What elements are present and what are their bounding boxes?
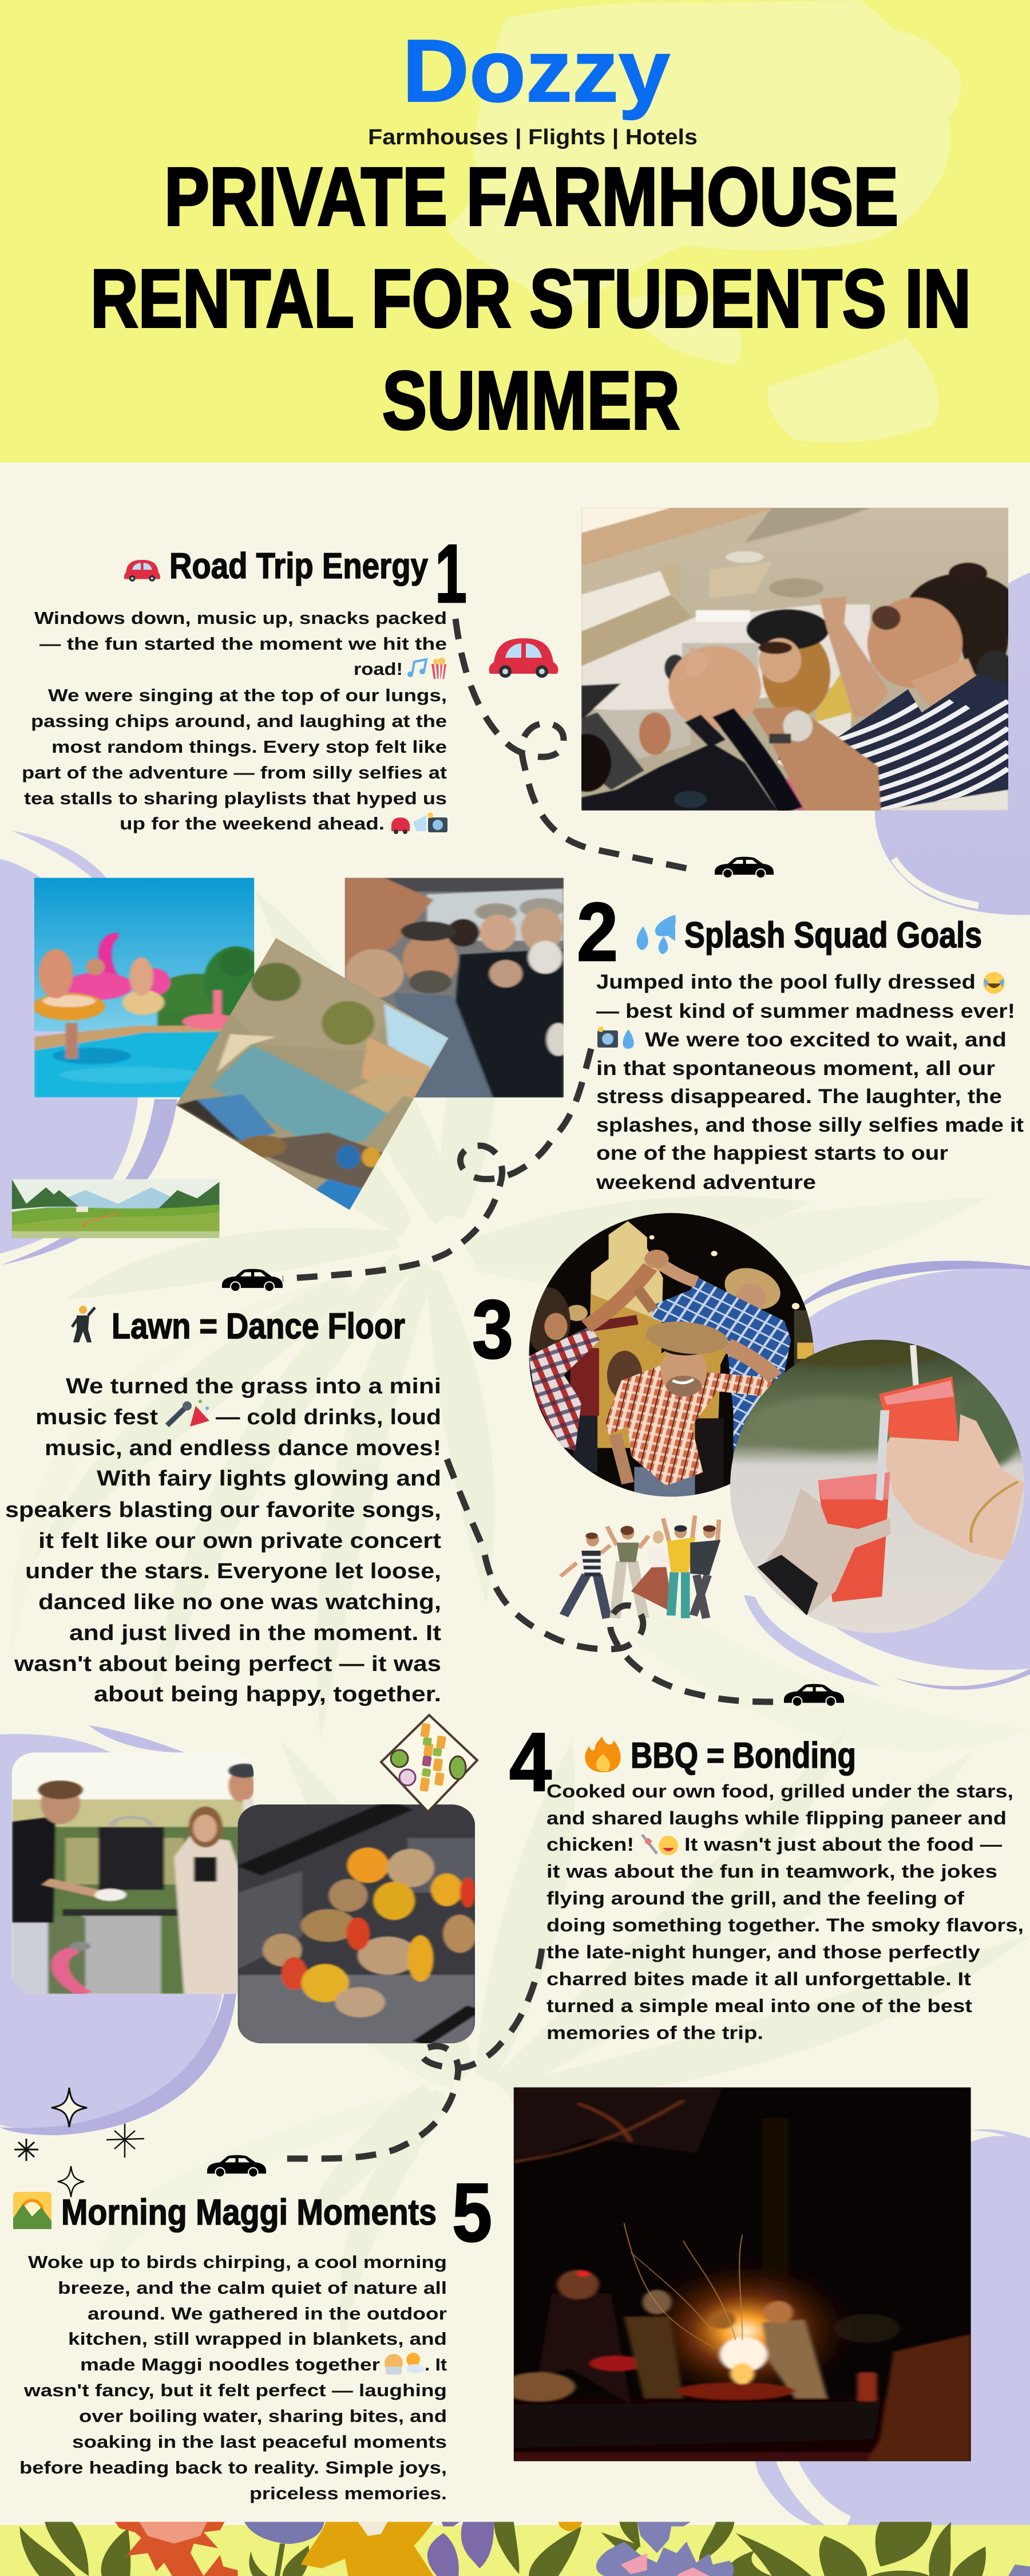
photo: rotated poolside villa <box>171 935 453 1212</box>
section 4 body text: the late-night hunger, and those perfectly <box>546 1942 980 1962</box>
emoji: car, dash, camera <box>391 812 447 834</box>
icon: water splash <box>636 915 676 954</box>
section 4 body text: chicken! <box>546 1834 634 1855</box>
section 5 body text: over boiling water, sharing bites, and <box>79 2406 447 2426</box>
section 3 body text: music, and endless dance moves! <box>45 1436 441 1460</box>
section 4 body text: memories of the trip. <box>546 2022 763 2043</box>
number 5: 5 <box>452 2166 492 2259</box>
dancer 5 <box>690 1520 720 1618</box>
illustration: green landscape <box>12 1179 219 1238</box>
section 3 body text: — cold drinks, loud <box>216 1405 441 1429</box>
icon: black car 2 <box>222 1269 283 1291</box>
section 4 body text: charred bites made it all unforgettable. It <box>546 1969 971 1989</box>
icon: black car 4 <box>207 2155 266 2177</box>
number 3: 3 <box>472 1283 513 1376</box>
title <box>90 151 971 447</box>
illustration: group of dancers <box>561 1516 720 1618</box>
section 4 body text: flying around the grill, and the feeling of <box>546 1888 964 1909</box>
icon: sunrise over mountains <box>13 2192 52 2229</box>
yellow lily <box>301 2522 582 2576</box>
section 1 body text: We were singing at the top of our lungs, <box>48 685 447 705</box>
section 5 body text: . It <box>425 2354 447 2374</box>
lavender blob: left of section 4 <box>0 1725 236 2135</box>
lavender blob: left of section 2 <box>0 831 177 1265</box>
emoji: kebab and yum face <box>642 1835 678 1855</box>
section 5 body text: around. We gathered in the outdoor <box>88 2304 447 2324</box>
section 1 body text: up for the weekend ahead. <box>120 813 385 833</box>
icon: black car 1 <box>715 857 774 878</box>
section 1 body text: part of the adventure — from silly selfies at <box>22 762 447 783</box>
lavender blob: right of section 3 <box>744 1262 1030 1690</box>
section 2 body text: We were too excited to wait, and <box>645 1029 1007 1051</box>
lavender blob: bottom right <box>752 2129 1030 2526</box>
section 4 body text: Cooked our own food, grilled under the stars, <box>546 1781 1013 1801</box>
icon: black car 3 <box>784 1684 844 1706</box>
lavender blob: top right <box>875 572 1030 915</box>
section 5 body text: wasn't fancy, but it felt perfect — laughing <box>23 2380 447 2400</box>
section 4 body text <box>546 1781 1024 2043</box>
dashed route 3 <box>447 1459 778 1702</box>
section 3 body text: and just lived in the moment. It <box>69 1621 441 1645</box>
tagline: Farmhouses | Flights | Hotels <box>368 125 698 149</box>
section 1 heading: Road Trip Energy <box>169 546 428 586</box>
dancer 1 <box>561 1532 610 1618</box>
dancer 3 <box>631 1531 674 1613</box>
emoji: laughing face <box>983 972 1005 994</box>
dashed route 4 <box>279 1949 542 2159</box>
section 3 body text <box>5 1374 441 1706</box>
section 2 body text: splashes, and those silly selfies made it <box>596 1114 1024 1136</box>
section 1 body text: road! <box>354 659 403 679</box>
section 3 body text: it felt like our own private concert <box>38 1529 441 1553</box>
section 2 body text: Jumped into the pool fully dressed <box>596 971 976 993</box>
photo: campfire at night <box>502 2087 971 2461</box>
section 5 body text <box>19 2252 447 2503</box>
section 4 body text: turned a simple meal into one of the best <box>546 1996 972 2016</box>
icon: fire <box>585 1736 621 1772</box>
lupin flowers <box>596 2522 1030 2576</box>
section 3 body text: speakers blasting our favorite songs, <box>5 1498 441 1522</box>
section 5 body text: before heading back to reality. Simple joys, <box>19 2458 447 2478</box>
section 1 body text: Windows down, music up, snacks packed <box>34 608 447 628</box>
title: SUMMER <box>382 354 680 447</box>
icons: sparkles <box>14 2088 144 2197</box>
dancer 4 <box>663 1516 696 1618</box>
photo: grilled skewers <box>238 1804 477 2043</box>
dancer 2 <box>607 1526 649 1618</box>
section 5 body text: priceless memories. <box>249 2483 447 2503</box>
icon: skewer platter <box>381 1715 477 1812</box>
photo: group selfie <box>345 878 570 1097</box>
footer: floral band <box>0 2522 1030 2576</box>
section 2 body text: stress disappeared. The laughter, the <box>596 1085 1002 1108</box>
icon: red car <box>124 560 160 582</box>
section 1 body text: most random things. Every stop felt like <box>52 737 447 757</box>
header band <box>0 0 1030 463</box>
orange flower <box>115 2522 238 2576</box>
section 2 body text: one of the happiest starts to our <box>596 1142 948 1164</box>
section 1 body text: passing chips around, and laughing at the <box>31 711 447 731</box>
section 5 body text: breeze, and the calm quiet of nature all <box>58 2278 447 2298</box>
emoji: camera and droplet <box>597 1026 634 1049</box>
faint world map <box>447 0 961 442</box>
icon: big red car <box>489 638 558 678</box>
section 1 body text <box>22 608 447 834</box>
section 1 body text: tea stalls to sharing playlists that hyped us <box>24 788 447 808</box>
section 3 body text: under the stars. Everyone let loose, <box>25 1559 441 1583</box>
section 2 body text <box>596 971 1024 1194</box>
section 4 body text: and shared laughs while flipping paneer and <box>546 1808 1007 1828</box>
dashed route 1 <box>455 619 695 870</box>
section 3 body text: music fest <box>35 1405 158 1429</box>
icon: dancing man <box>72 1306 95 1342</box>
photo: friends in car <box>562 508 1020 817</box>
section 5 body text: Woke up to birds chirping, a cool morning <box>28 2252 447 2272</box>
section 2 body text: weekend adventure <box>596 1171 816 1194</box>
section 2 body text: — best kind of summer madness ever! <box>596 1000 1015 1022</box>
purple tulip <box>244 2522 324 2576</box>
section 4 body text: It wasn't just about the food — <box>684 1834 1002 1855</box>
green leaves <box>19 2522 986 2576</box>
background palm fronds <box>11 890 1030 2347</box>
section 3 heading: Lawn = Dance Floor <box>112 1306 405 1346</box>
logo: Dozzy: Dozzy <box>402 21 670 120</box>
section 4 heading: BBQ = Bonding <box>631 1736 856 1776</box>
section 5 body text: kitchen, still wrapped in blankets, and <box>68 2329 447 2349</box>
section 3 body text: danced like no one was watching, <box>38 1590 441 1614</box>
section 4 body text: it was about the fun in teamwork, the jokes <box>546 1861 997 1882</box>
photo circle: dancing friends <box>525 1213 817 1499</box>
section 4 body text: doing something together. The smoky flavors, <box>546 1915 1024 1935</box>
number 1: 1 <box>435 527 467 620</box>
section 2 heading: Splash Squad Goals <box>684 915 982 955</box>
photo: friends at barbecue grill <box>12 1752 260 1994</box>
section 3 body text: We turned the grass into a mini <box>66 1374 441 1398</box>
section 5 body text: made Maggi noodles together <box>80 2354 380 2374</box>
section 3 body text: wasn't about being perfect — it was <box>14 1652 441 1676</box>
photo circle: red drinks <box>727 1337 1030 1634</box>
number 4: 4 <box>509 1716 552 1808</box>
section 5 body text: soaking in the last peaceful moments <box>72 2432 447 2452</box>
dashed route 2 <box>283 1049 591 1279</box>
section 2 body text: in that spontaneous moment, all our <box>596 1057 995 1080</box>
section 3 body text: about being happy, together. <box>94 1682 441 1706</box>
emoji: notes and popcorn <box>407 658 446 679</box>
photo: pool party with flamingo float <box>33 878 270 1097</box>
section 5 heading: Morning Maggi Moments <box>61 2192 437 2233</box>
section 1 body text: — the fun started the moment we hit the <box>39 634 447 654</box>
purple buds <box>427 2522 494 2576</box>
emoji: noodles and sun <box>385 2353 425 2374</box>
section 3 body text: With fairy lights glowing and <box>97 1467 441 1491</box>
emoji: microphone and party popper <box>167 1400 209 1427</box>
number 2: 2 <box>577 886 618 978</box>
